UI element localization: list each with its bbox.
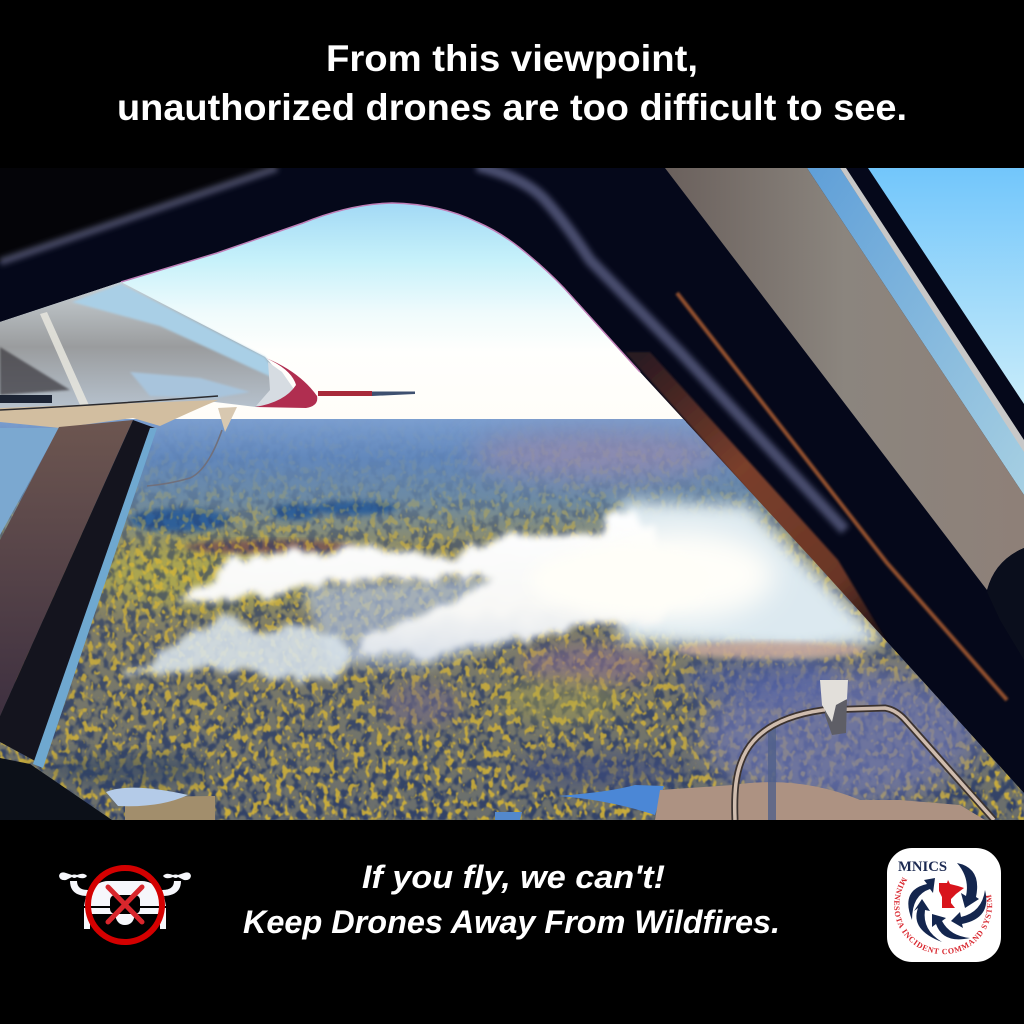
logo swirl arrows <box>908 863 986 942</box>
sky <box>0 204 686 422</box>
bright right body <box>585 530 775 620</box>
handle bracket <box>820 680 848 722</box>
wing dark root <box>0 347 70 395</box>
dark roller at panel end <box>1006 548 1024 559</box>
strut tan face <box>0 420 133 716</box>
handle clamp <box>825 700 847 735</box>
wing underside reflection <box>130 372 250 398</box>
bright core <box>530 548 710 612</box>
forest texture <box>0 418 1024 820</box>
door handle <box>735 680 994 820</box>
wing root underside <box>0 400 218 428</box>
forest tone overlays <box>700 665 980 805</box>
outside sky beyond the window post <box>868 168 1024 404</box>
warm haze under smoke <box>675 642 865 658</box>
beige cabin panel <box>665 168 1024 590</box>
call to action: Keep Drones Away From Wildfires. <box>243 904 780 940</box>
pitot tube <box>318 391 372 396</box>
logo Minnesota map <box>939 880 964 908</box>
strut <box>0 420 157 820</box>
strut dark face <box>0 420 155 762</box>
wing white stripe <box>40 312 88 405</box>
photo: view from aircraft window <box>0 166 1024 820</box>
mid haze <box>300 575 520 668</box>
drone <box>59 872 191 929</box>
cabin corner <box>0 758 112 820</box>
prohibition ring <box>88 868 162 942</box>
call to action: If you fly, we can't! <box>362 859 665 895</box>
call to action <box>243 859 780 940</box>
MNICS logo <box>887 848 1001 962</box>
title: From this viewpoint, <box>326 38 698 79</box>
frame highlight: orange line <box>677 293 1007 700</box>
frame highlight: upper left <box>0 168 277 262</box>
frame brown strip <box>625 352 895 655</box>
wing tip silver <box>256 362 294 406</box>
logo ring text: MINNESOTA INCIDENT COMMAND SYSTEM <box>894 876 992 954</box>
wing <box>0 282 415 486</box>
smoke haze <box>620 500 885 652</box>
lower plume <box>125 613 345 682</box>
smoke plume <box>125 500 885 682</box>
wing tip red fairing <box>255 358 317 408</box>
ground colour patches <box>470 431 730 479</box>
left ground view <box>0 428 59 535</box>
logo wordmark: MNICS <box>898 859 947 875</box>
drone prohibited icon <box>59 868 191 942</box>
frame corner shading <box>0 168 280 262</box>
frame highlight: arch stripe <box>477 166 845 530</box>
ground <box>0 418 1024 820</box>
prohibition cross <box>108 887 142 922</box>
wing seam <box>0 396 218 410</box>
window view <box>0 200 1024 820</box>
drone camera <box>110 895 140 914</box>
title: unauthorized drones are too difficult to see. <box>117 87 907 128</box>
upper plume <box>176 513 680 660</box>
wing skin <box>0 282 272 408</box>
title <box>117 38 907 128</box>
window edge pink line <box>121 203 640 372</box>
antenna <box>218 407 237 432</box>
logo badge <box>887 848 1001 962</box>
lakes and meadows <box>125 796 215 820</box>
window post: blue strip <box>807 168 1024 495</box>
lettering strip <box>0 395 52 403</box>
window post: silver line <box>840 168 1024 452</box>
dark hills near horizon <box>130 501 397 532</box>
wing light-blue top band <box>72 284 282 382</box>
strut blue edge <box>33 428 157 768</box>
